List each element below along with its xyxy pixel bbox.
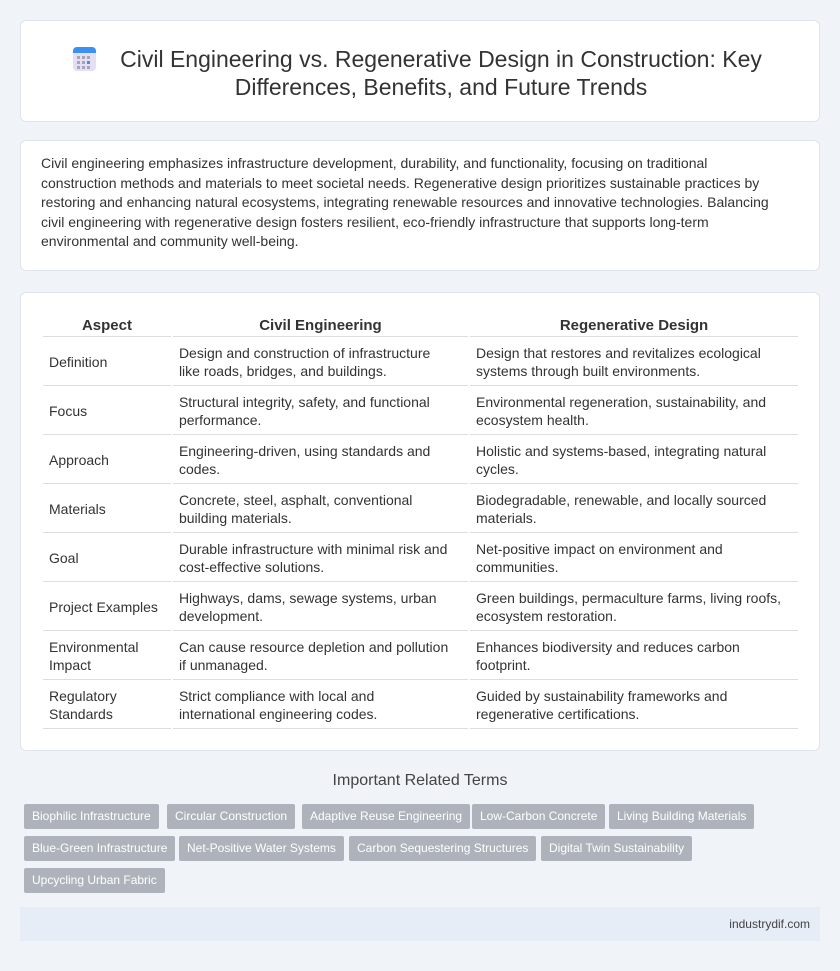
comparison table: Concrete, steel, asphalt, conventional building materials. bbox=[179, 492, 412, 526]
footer bbox=[20, 907, 820, 941]
tags: Low-Carbon Concrete bbox=[480, 809, 597, 823]
comparison table: Design and construction of infrastructure like roads, bridges, and buildings. bbox=[179, 345, 430, 379]
tags: Biophilic Infrastructure bbox=[32, 809, 151, 823]
comparison table: Design that restores and revitalizes ecological systems through built environments. bbox=[476, 345, 761, 379]
comparison table: Materials bbox=[49, 501, 106, 517]
tags: Carbon Sequestering Structures bbox=[357, 841, 528, 855]
comparison table: Biodegradable, renewable, and locally sourced materials. bbox=[476, 492, 766, 526]
comparison table bbox=[20, 292, 820, 751]
comparison table: Civil Engineering bbox=[259, 317, 382, 334]
comparison table: Goal bbox=[49, 550, 79, 566]
comparison table: Can cause resource depletion and pollution if unmanaged. bbox=[179, 639, 448, 673]
comparison table: Aspect bbox=[82, 317, 132, 334]
tags: Adaptive Reuse Engineering bbox=[310, 809, 462, 823]
header card bbox=[20, 20, 820, 122]
comparison table: Structural integrity, safety, and functional performance. bbox=[179, 394, 430, 428]
comparison table: Holistic and systems-based, integrating natural cycles. bbox=[476, 443, 766, 477]
comparison table: Regulatory Standards bbox=[49, 688, 117, 722]
icon: calendar bbox=[73, 47, 96, 71]
intro text: Civil engineering emphasizes infrastructure development, durability, and functionality, focusing on traditional construction methods and materials to meet societal needs. Regenerative design prioritizes sustainable practices by restoring and enhancing natural ecosystems, integrating renewable resources and innovative technologies. Balancing civil engineering with regenerative design fosters resilient, eco-friendly infrastructure that supports long-term environmental and community well-being. bbox=[41, 155, 769, 249]
footer: industrydif.com bbox=[729, 917, 810, 931]
comparison table: Project Examples bbox=[49, 599, 158, 615]
tags: Living Building Materials bbox=[617, 809, 746, 823]
tags: Digital Twin Sustainability bbox=[549, 841, 684, 855]
tags: Net-Positive Water Systems bbox=[187, 841, 336, 855]
comparison table: Durable infrastructure with minimal risk and cost-effective solutions. bbox=[179, 541, 447, 575]
comparison table: Focus bbox=[49, 403, 87, 419]
tags: Circular Construction bbox=[175, 809, 287, 823]
comparison table: Definition bbox=[49, 354, 107, 370]
comparison table: Environmental Impact bbox=[49, 639, 138, 673]
title: Civil Engineering vs. Regenerative Design in Construction: Key Differences, Benefits, and Future Trends bbox=[120, 46, 762, 100]
comparison table: Highways, dams, sewage systems, urban development. bbox=[179, 590, 436, 624]
tags: Blue-Green Infrastructure bbox=[32, 841, 167, 855]
comparison table: Enhances biodiversity and reduces carbon footprint. bbox=[476, 639, 740, 673]
comparison table: Net-positive impact on environment and communities. bbox=[476, 541, 723, 575]
comparison table: Strict compliance with local and international engineering codes. bbox=[179, 688, 377, 722]
related terms heading: Important Related Terms bbox=[333, 772, 507, 789]
comparison table: Guided by sustainability frameworks and regenerative certifications. bbox=[476, 688, 727, 722]
comparison table: Green buildings, permaculture farms, living roofs, ecosystem restoration. bbox=[476, 590, 781, 624]
comparison table: Engineering-driven, using standards and codes. bbox=[179, 443, 430, 477]
comparison table: Approach bbox=[49, 452, 109, 468]
comparison table: Environmental regeneration, sustainability, and ecosystem health. bbox=[476, 394, 766, 428]
tags: Upcycling Urban Fabric bbox=[32, 873, 157, 887]
intro text bbox=[20, 140, 820, 271]
comparison table: Regenerative Design bbox=[560, 317, 708, 334]
